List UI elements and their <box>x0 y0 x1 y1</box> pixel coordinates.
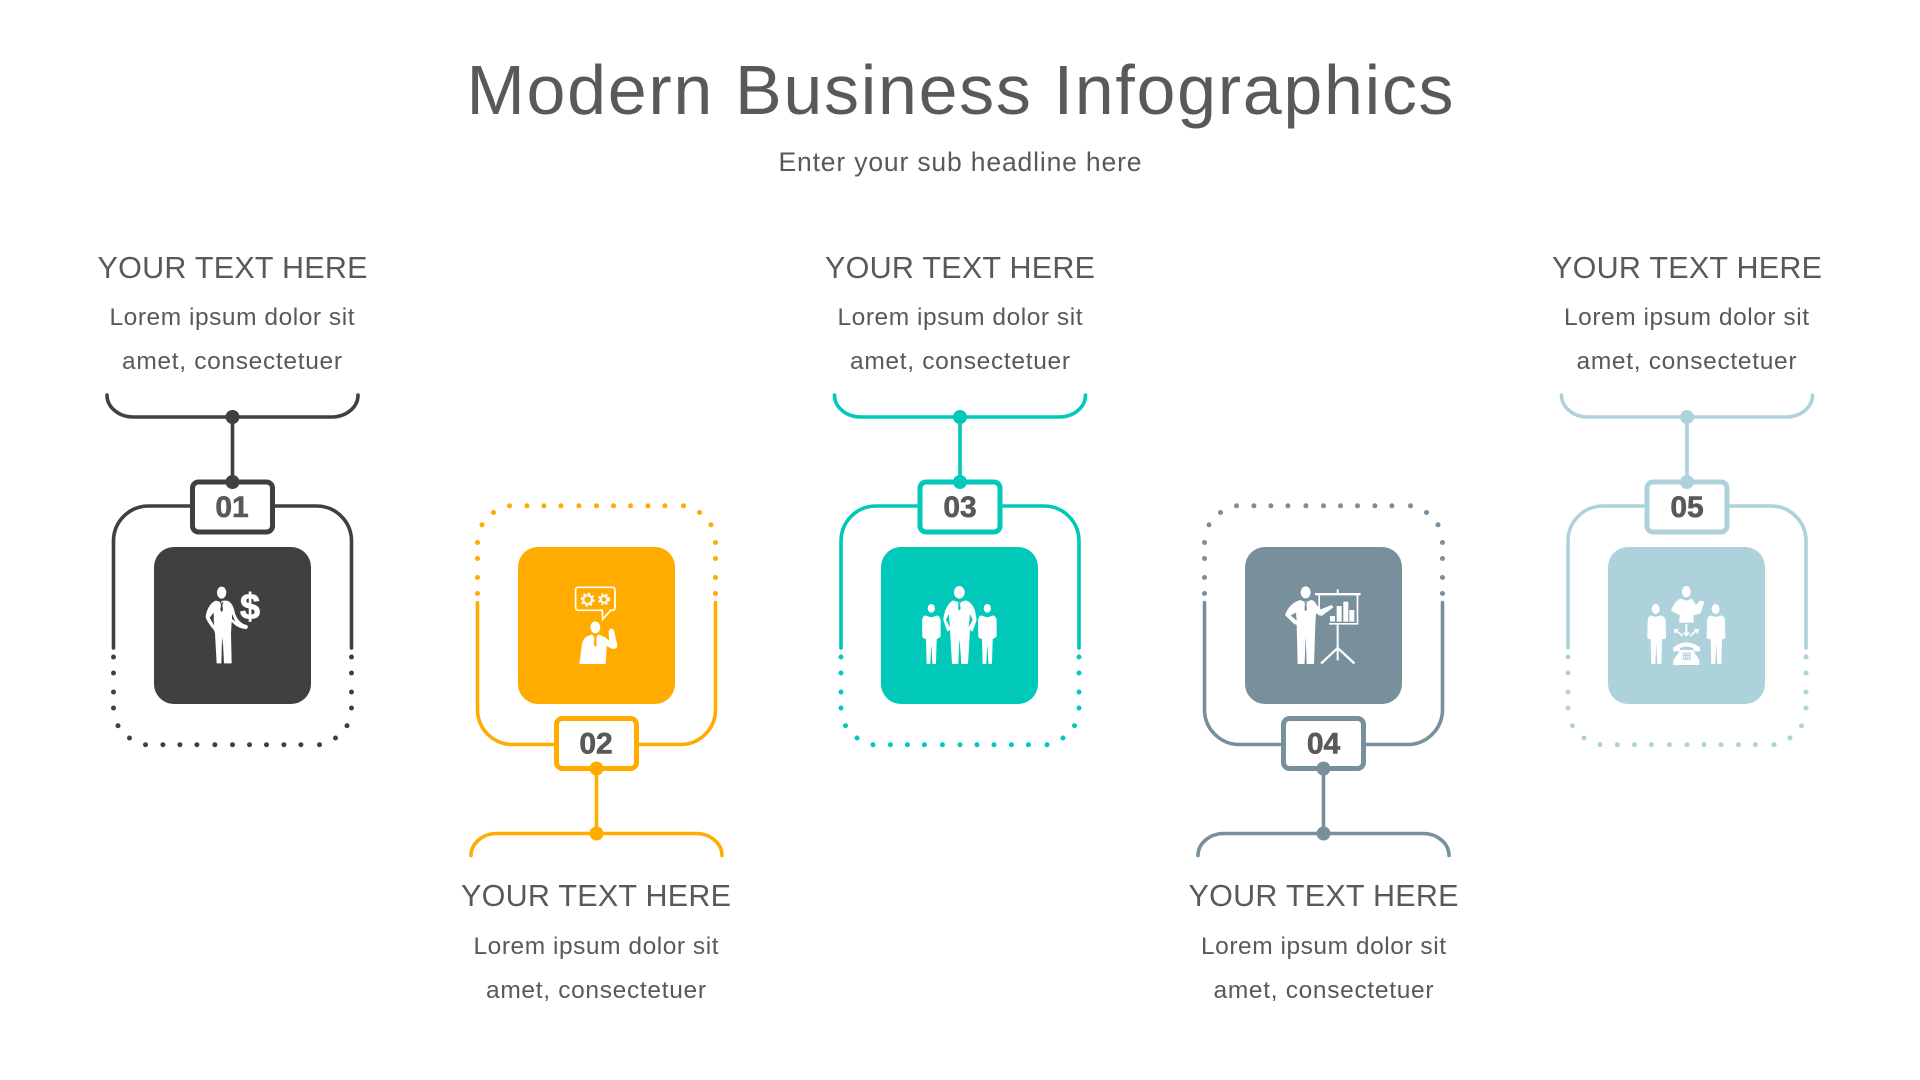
text block: step 01: YOUR TEXT HERE <box>98 251 368 285</box>
text block: step 03: Lorem ipsum dolor sit <box>838 304 1083 331</box>
text block: step 03: amet, consectetuer <box>850 348 1070 375</box>
number: 02: 02 <box>579 728 613 760</box>
icon tile: presenter with chart <box>1245 547 1402 704</box>
number: 04: 04 <box>1307 728 1340 760</box>
icon tile: team of three <box>881 547 1038 704</box>
text block: step 03 <box>825 251 1095 375</box>
text block: step 01 <box>98 251 368 375</box>
subtitle: Enter your sub headline here <box>778 147 1142 177</box>
text block: step 02: YOUR TEXT HERE <box>461 879 731 913</box>
connector frame: step 04 <box>1198 506 1449 856</box>
text block: step 04 <box>1188 879 1458 1004</box>
number: 03: 03 <box>943 491 977 524</box>
icon tile: businessman with dollar: $ <box>240 586 260 627</box>
text block: step 05 <box>1552 251 1822 375</box>
text block: step 05: amet, consectetuer <box>1576 348 1796 375</box>
icon tile: manager with gears <box>518 547 675 704</box>
text block: step 04: YOUR TEXT HERE <box>1188 879 1458 913</box>
number: 01: 01 <box>215 491 249 524</box>
connector frame: step 02 <box>471 506 722 856</box>
connector frame: step 05 <box>1562 395 1812 745</box>
text block: step 02: Lorem ipsum dolor sit <box>474 933 719 960</box>
text block: step 05: YOUR TEXT HERE <box>1552 251 1822 285</box>
text block: step 04: amet, consectetuer <box>1214 977 1434 1004</box>
icon tile: businessman with dollar <box>154 547 311 704</box>
text block: step 01: Lorem ipsum dolor sit <box>110 304 355 331</box>
connector frame: step 01 <box>107 395 358 745</box>
panel: step 03 <box>825 251 1095 745</box>
text block: step 02 <box>461 879 731 1004</box>
panel: step 01 <box>98 251 368 745</box>
panel: step 04 <box>1188 506 1458 1004</box>
number: 05: 05 <box>1670 491 1704 524</box>
text block: step 02: amet, consectetuer <box>486 977 706 1004</box>
icon tile: team around phone <box>1608 547 1765 704</box>
title: Modern Business Infographics <box>466 51 1454 129</box>
text block: step 04: Lorem ipsum dolor sit <box>1201 933 1446 960</box>
text block: step 01: amet, consectetuer <box>122 348 342 375</box>
panel: step 02 <box>461 506 731 1004</box>
text block: step 05: Lorem ipsum dolor sit <box>1564 304 1809 331</box>
text block: step 03: YOUR TEXT HERE <box>825 251 1095 285</box>
panel: step 05 <box>1552 251 1822 745</box>
connector frame: step 03 <box>834 395 1086 745</box>
